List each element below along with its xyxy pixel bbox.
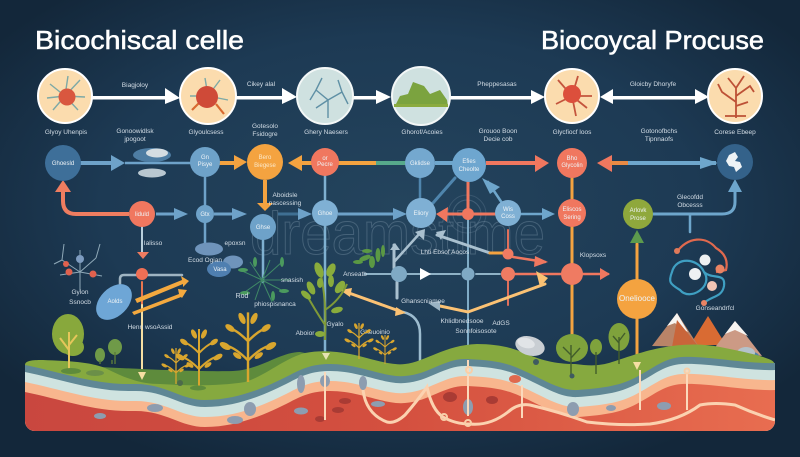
knot icon	[670, 240, 727, 306]
small network labels: Ialisso	[144, 240, 163, 247]
icon: tree-like structure	[708, 69, 762, 123]
node: light blue large: Efies	[462, 159, 476, 165]
icon: cell 1	[38, 69, 92, 123]
node: light blue: Gklidse	[410, 161, 431, 167]
small network labels: Gheuoinio	[360, 329, 390, 336]
soil rocks and roots	[94, 360, 690, 426]
small network labels: Gylon	[72, 289, 89, 296]
icon: cell 2	[180, 68, 236, 124]
node: blue: Gn	[201, 155, 209, 161]
small network labels: Ssnocb	[69, 299, 91, 306]
small network labels: epoxsn	[225, 240, 246, 247]
green plant	[299, 261, 347, 340]
top labels: Fsidogre	[252, 131, 278, 138]
ground layers	[25, 344, 775, 431]
top labels	[45, 81, 756, 143]
small network labels: Sonnfoisosote	[455, 328, 497, 335]
node: coral row four	[501, 267, 515, 281]
small network labels: Ecod Ogian	[188, 257, 222, 264]
node: blue	[312, 200, 338, 226]
node: dark icon	[717, 144, 753, 180]
top labels: jpogoot	[123, 136, 146, 143]
node: green: Prose	[630, 216, 646, 222]
orange double arrows	[132, 276, 189, 315]
node: orange large: Oneliooce	[619, 294, 656, 303]
node: blue small	[196, 205, 214, 223]
small network labels: Ghanscniamoe	[401, 298, 445, 305]
small network labels: phiospisnanca	[254, 301, 296, 308]
icon: branching cell	[297, 68, 353, 124]
node: blue: Eliory	[413, 211, 429, 217]
title: left heading: Bicochiscal celle	[35, 25, 244, 55]
top labels: Biagjoloy	[122, 82, 149, 89]
node: green	[623, 199, 653, 229]
node: coral tiny	[462, 208, 474, 220]
node: coral row four large	[561, 263, 583, 285]
node: coral small	[129, 201, 155, 227]
small network labels: AdGS	[492, 320, 510, 327]
node: blue: Wis	[503, 207, 513, 213]
node: coral right: Bho	[567, 156, 578, 162]
green starburst	[238, 257, 290, 302]
small network labels: Lhti Ebsof Aocos	[421, 249, 470, 256]
small network labels: Vasa	[213, 267, 227, 273]
row two arrows	[55, 155, 742, 316]
small network labels: Aboior	[296, 330, 315, 337]
node: blue mid: Ghse	[256, 225, 271, 231]
title: right heading: Biocoycal Procuse	[541, 25, 764, 55]
top labels: Pheppesasas	[477, 81, 517, 88]
node: blue: Pisye	[198, 162, 213, 168]
node: dark blue start: Ghoesld	[52, 161, 74, 167]
small network labels	[69, 192, 735, 337]
small network labels: Khlidbnedsooe	[440, 318, 484, 325]
node: blue: Ghoe	[318, 211, 333, 217]
node: coral: or	[322, 156, 328, 162]
top labels: Decie cob	[484, 136, 513, 143]
small network labels: nascessing	[269, 200, 302, 207]
node: coral: Eliscos	[562, 207, 582, 213]
top labels: Gotonofbchs	[641, 128, 678, 135]
node: orange: Bero	[259, 155, 272, 161]
top labels: Glycfiocf loos	[553, 129, 592, 136]
node: dark blue start	[45, 145, 81, 181]
small network labels: Obcesss	[677, 202, 703, 209]
node: coral right: Glycolin	[561, 163, 583, 169]
small network labels: Rod	[236, 293, 249, 300]
node: blue row four left	[391, 266, 407, 282]
connector network	[120, 175, 735, 375]
text: dreamstime	[250, 200, 545, 267]
top labels: Glyoy Uhenpis	[45, 129, 88, 136]
node: blue	[495, 200, 521, 226]
top row cell icons	[38, 67, 762, 125]
icon: green landscape	[392, 67, 450, 125]
node: orange large	[617, 279, 657, 319]
small network labels: Anseatb	[343, 271, 367, 278]
node: blue row four	[462, 268, 474, 280]
small network labels: Aolds	[107, 299, 123, 305]
top labels: Gloicby Dhoryfe	[630, 81, 676, 88]
top labels: Ghery Naesers	[304, 129, 349, 136]
network tree icon	[54, 244, 102, 290]
node: coral right	[557, 148, 587, 178]
node: blue mid	[250, 214, 276, 240]
top labels: Cikey alal	[247, 81, 276, 88]
node: green: Arlovk	[630, 208, 647, 214]
node: orange	[247, 144, 283, 180]
node: blue: Coss	[501, 214, 515, 220]
row three nodes	[129, 198, 657, 319]
top labels: Ghorof/Acoies	[401, 129, 443, 136]
clouds	[133, 148, 171, 178]
node: light blue	[405, 148, 435, 178]
trees left	[52, 314, 122, 376]
node: blue	[406, 198, 436, 228]
small network labels: Aboidsle	[273, 192, 298, 199]
node: blue small: Gtx	[200, 212, 210, 218]
yellow plants	[161, 312, 397, 390]
icon: red cell with branches	[545, 69, 599, 123]
top labels: Gotesolo	[252, 123, 278, 130]
node: coral	[311, 148, 339, 176]
node: coral	[558, 199, 586, 227]
stone and right trees	[138, 323, 641, 380]
small green sprig	[353, 245, 385, 268]
small network labels: snasish	[281, 277, 303, 284]
small network labels: Glecofdd	[677, 194, 703, 201]
top labels: Glyoulcsess	[188, 129, 224, 136]
node: blue	[190, 147, 220, 177]
node: light blue large	[452, 148, 486, 182]
mountains	[652, 313, 762, 361]
node: coral small: liduld	[135, 212, 149, 218]
top labels: Gonoowidlsk	[116, 128, 154, 135]
small network labels: Gonseandrfcl	[696, 305, 735, 312]
node: coral upper	[502, 248, 514, 260]
node: coral left marker	[136, 268, 148, 280]
node: coral: Pecre	[317, 162, 333, 168]
row two nodes	[45, 144, 753, 182]
node: coral: Sering	[563, 215, 581, 221]
small network labels: Klopsoxs	[580, 252, 607, 259]
small network labels: Henn wsoAssid	[128, 324, 173, 331]
node: orange: Biegese	[254, 163, 277, 169]
top row arrows	[90, 88, 709, 104]
top labels: Tipnnaofs	[645, 136, 674, 143]
top labels: Grouoo Boon	[479, 128, 518, 135]
node: light blue large: Cheolte	[459, 167, 480, 173]
top labels: Corese Ebeep	[714, 129, 756, 136]
blobs	[89, 242, 243, 327]
small network labels: Gyalo	[327, 321, 344, 328]
